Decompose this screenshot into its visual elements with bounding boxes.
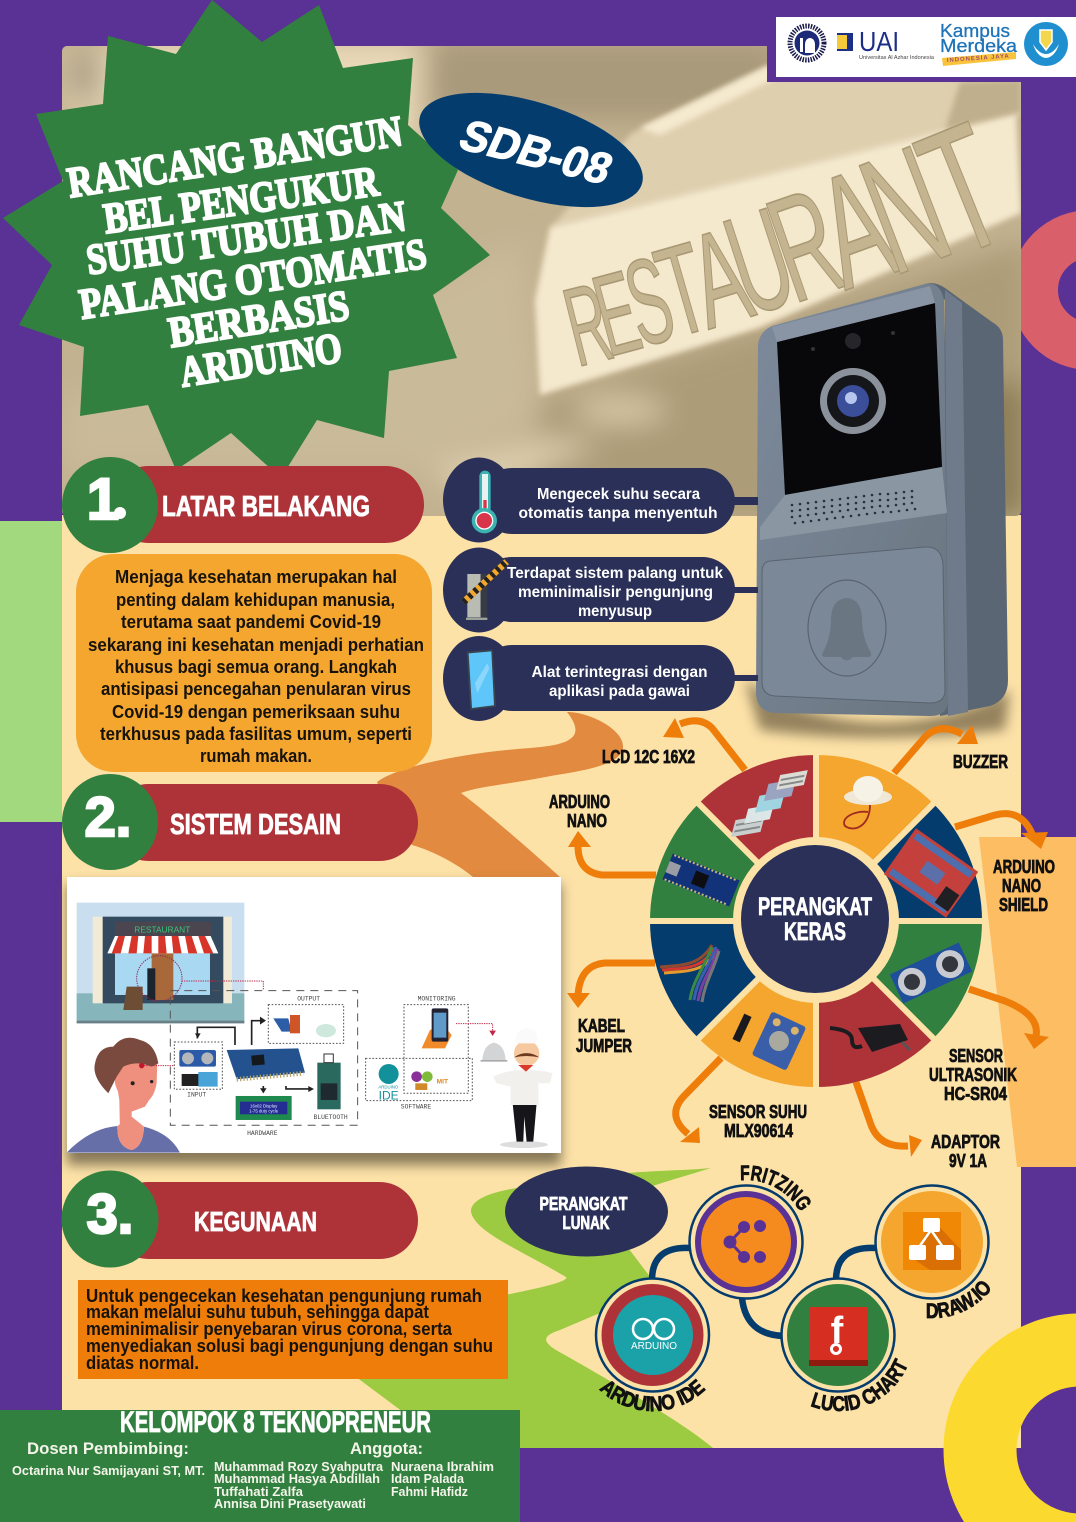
footer panel: team: Tuffahati Zalfa: [214, 1484, 304, 1499]
code badge: SDB-08: [406, 70, 656, 230]
panel: usage text: diatas normal.: [86, 1353, 199, 1373]
panel: usage text: makan melalui suhu tubuh, sehingga dapat: [86, 1302, 429, 1322]
software: Draw.io: DRAW.IO: [926, 1281, 990, 1318]
connectors from feature pills to doorbell: [730, 497, 758, 681]
hardware labels: [549, 747, 1055, 1171]
panel: background text: penting dalam kehidupan manusia,: [116, 590, 395, 610]
speaker grille: [791, 490, 916, 524]
sign lettering: T: [896, 85, 1031, 294]
logo: UAI: UAI: [859, 26, 899, 57]
lens: [811, 331, 895, 434]
logo: Kampus Merdeka: Merdeka: [940, 36, 1018, 56]
logo strip: [767, 10, 1076, 82]
icon: smartphone: [467, 649, 496, 710]
section heading 1: Latar Belakang: [62, 457, 424, 553]
feature pill: barrier gate: Terdapat sistem palang untuk: [507, 565, 723, 582]
illustration: hardware block: OUTPUT: [297, 996, 320, 1003]
panel: background text: sekarang ini kesehatan menjadi perhatian: [88, 635, 424, 655]
screen: [777, 303, 942, 495]
panel: light orange band at right: [979, 837, 1076, 1167]
feature pill: barrier gate: meminimalisir pengunjung: [518, 584, 713, 601]
illustration: chef: [481, 1028, 553, 1148]
panel: usage text: Untuk pengecekan kesehatan pengunjung rumah: [86, 1286, 482, 1306]
software: Lucidchart: LUCID CHART: [810, 1358, 908, 1412]
hardware labels: ARDUINO: [549, 792, 610, 812]
illustration: software and monitoring: [366, 996, 496, 1111]
hardware labels: JUMPER: [576, 1036, 632, 1056]
logo: Kampus Merdeka: Kampus: [940, 21, 1010, 41]
hardware labels: NANO: [1002, 876, 1041, 896]
hardware labels: LCD 12C 16X2: [602, 747, 695, 767]
illustration: software and monitoring: MONITORING: [418, 996, 456, 1003]
code badge: SDB-08: SDB-08: [452, 112, 620, 194]
panel: background text: khusus bagi semua orang. Langkah: [115, 657, 397, 677]
arrows from wheel to labels: [567, 718, 1049, 1157]
sign lettering: U: [708, 178, 812, 346]
arrow: nano shield: [955, 814, 1048, 849]
arrow: ultrasonic: [969, 989, 1049, 1049]
hardware labels: BUZZER: [953, 752, 1008, 772]
feature pill: temperature check: otomatis tanpa menyentuh: [518, 505, 718, 522]
panel: usage text: [78, 1280, 508, 1379]
hardware labels: MLX90614: [724, 1121, 793, 1141]
hardware labels: ARDUINO: [993, 857, 1055, 877]
component: arduino nano: [662, 854, 740, 906]
sign lettering: E: [581, 247, 652, 381]
illustration: hardware block: HARDWARE: [247, 1130, 278, 1137]
arrow: buzzer: [894, 725, 978, 773]
arrow: arduino nano: [568, 831, 656, 875]
arrow: temperature sensor: [676, 1058, 721, 1143]
section heading 2: Sistem Desain: 2.: [85, 785, 131, 848]
software heading ellipse: [505, 1166, 668, 1256]
hardware labels: ULTRASONIK: [929, 1065, 1017, 1085]
section heading 2: Sistem Desain: SISTEM DESAIN: [170, 809, 341, 841]
footer panel: team: Fahmi Hafidz: [391, 1484, 468, 1499]
component: jumper cables: [660, 945, 719, 1002]
illustration: restaurant storefront: RESTAURANT: [134, 926, 190, 935]
title: ARDUINO: [177, 325, 345, 397]
illustration: software and monitoring: ARDUINO: [378, 1085, 399, 1090]
illustration: software and monitoring: SOFTWARE: [401, 1104, 431, 1111]
arrow: LCD: [663, 718, 745, 770]
component: nano shield: [884, 828, 978, 918]
software: Fritzing: FRITZING: [740, 1165, 811, 1210]
component: power adaptor: [830, 1024, 910, 1052]
title: BERBASIS: [165, 282, 352, 357]
component: temperature sensor: [732, 1011, 806, 1071]
illustration: person: [67, 1038, 180, 1153]
arrow: adaptor: [856, 1082, 922, 1157]
section heading 3: Kegunaan: 3.: [87, 1182, 133, 1245]
sign lettering: A: [796, 134, 915, 323]
wheel hub: KERAS: [784, 918, 846, 946]
panel: background text: [76, 554, 432, 772]
panel: background text: terkhusus pada fasilitas umum, seperti: [100, 724, 412, 744]
panel: cream paper: [62, 515, 1021, 1448]
logo: UAI: Universitas Al Azhar Indonesia: [859, 55, 935, 61]
section heading 1: Latar Belakang: LATAR BELAKANG: [162, 491, 370, 523]
illustration: restaurant storefront: [77, 903, 263, 1023]
title: BEL PENGUKUR: [101, 158, 382, 243]
sign lettering: R: [749, 156, 861, 334]
background swoosh: orange: [377, 712, 623, 877]
section heading 1: Latar Belakang: 1: [87, 467, 119, 532]
logo: Tut Wuri Handayani: [1024, 22, 1068, 66]
icon: thermometer: [472, 471, 497, 533]
panel: light green strip at left: [0, 521, 72, 822]
illustration: software and monitoring: MIT: [437, 1078, 448, 1085]
illustration: hardware block: 16x02 Display: [250, 1103, 278, 1108]
software: Lucidchart: f: [831, 1310, 844, 1352]
illustration: hardware block: BLUETOOTH: [314, 1114, 348, 1121]
feature pill: temperature check: Mengecek suhu secara: [537, 486, 700, 503]
section heading 3: Kegunaan: [62, 1170, 418, 1268]
footer panel: team: Anggota:: [350, 1439, 423, 1458]
hardware wheel: [645, 750, 987, 1092]
illustration: hardware block: [170, 991, 358, 1137]
panel: usage text: menyediakan solusi bagi pengunjung dengan suhu: [86, 1336, 493, 1356]
footer panel: team: [0, 1406, 520, 1522]
panel: background text: antisipasi pencegahan penularan virus: [101, 679, 411, 699]
software: Lucidchart: [780, 1277, 908, 1412]
wheel hub: [741, 845, 889, 993]
hardware labels: 9V 1A: [949, 1151, 987, 1171]
component: ultrasonic sensor: [890, 942, 972, 1004]
title: RANCANG BANGUN: [64, 108, 405, 207]
software: Arduino IDE: ARDUINO IDE: [598, 1378, 706, 1412]
icon: barrier: [463, 562, 507, 620]
footer panel: team: Nuraena Ibrahim: [391, 1459, 494, 1474]
logo: Al Azhar: [790, 26, 824, 60]
panel: background text: Covid-19 dengan pemeriksaan suhu: [112, 702, 400, 722]
footer panel: team: Octarina Nur Samijayani ST, MT.: [12, 1464, 205, 1478]
footer panel: team: Idam Palada: [391, 1471, 465, 1486]
title starburst: [3, 0, 490, 478]
illustration: hardware block: 1-75 duty cycle: [249, 1108, 279, 1113]
hardware labels: KABEL: [578, 1016, 625, 1036]
sign lettering: R: [553, 259, 622, 390]
component: LCD: [731, 770, 808, 837]
feature pill: barrier gate: menyusup: [578, 603, 652, 620]
footer panel: team: Muhammad Hasya Abdillah: [214, 1471, 380, 1486]
footer panel: team: Muhammad Rozy Syahputra: [214, 1459, 384, 1474]
panel: background text: rumah makan.: [200, 746, 312, 766]
hardware labels: SENSOR SUHU: [709, 1102, 807, 1122]
software: Fritzing: [688, 1165, 811, 1300]
decorative ring: coral: [1034, 234, 1076, 346]
software heading ellipse: LUNAK: [562, 1213, 610, 1233]
logo: UAI: [837, 26, 935, 61]
arrow: jumper: [567, 963, 655, 1008]
software heading ellipse: PERANGKAT: [540, 1194, 628, 1214]
doorbell device: [745, 283, 1010, 738]
hardware labels: SHIELD: [999, 895, 1048, 915]
sign lettering: A: [673, 200, 766, 358]
feature pill: barrier gate: [443, 548, 735, 632]
photo: restaurant sign in sepia: [62, 40, 1031, 520]
panel: system design diagram: [67, 877, 561, 1165]
hardware labels: SENSOR: [949, 1046, 1003, 1066]
section heading 3: Kegunaan: KEGUNAAN: [194, 1206, 317, 1237]
sectors: [816, 755, 933, 921]
title: [64, 108, 430, 397]
footer panel: team: Dosen Pembimbing:: [27, 1439, 189, 1458]
software: Arduino IDE: [594, 1277, 710, 1412]
illustration: hardware block: INPUT: [187, 1092, 206, 1099]
sign lettering: [562, 120, 991, 367]
feature pill: phone app: Alat terintegrasi dengan: [532, 664, 708, 681]
wheel hub: PERANGKAT: [758, 893, 872, 921]
component: buzzer: [844, 776, 892, 828]
doorbell button: [762, 547, 945, 703]
footer panel: team: Annisa Dini Prasetyawati: [214, 1496, 366, 1511]
sign lettering: S: [612, 232, 687, 373]
panel: background text: Menjaga kesehatan merupakan hal: [115, 567, 397, 587]
sign lettering: N: [839, 111, 972, 311]
background swoosh: light green: [340, 1168, 713, 1448]
feature pill: temperature check: [443, 458, 735, 542]
hardware labels: ADAPTOR: [931, 1132, 1000, 1152]
logo: Kampus Merdeka: [940, 21, 1018, 66]
decorative ring: yellow: [980, 1350, 1076, 1522]
section heading 2: Sistem Desain: [62, 774, 418, 870]
footer panel: team: KELOMPOK 8 TEKNOPRENEUR: [120, 1406, 431, 1439]
software: Draw.io: [874, 1184, 990, 1318]
title: PALANG OTOMATIS: [76, 231, 430, 329]
hardware labels: HC-SR04: [944, 1084, 1007, 1104]
feature pill: phone app: [443, 636, 735, 721]
illustration: software and monitoring: IDE: [379, 1089, 399, 1103]
hardware labels: NANO: [567, 811, 607, 831]
title: SUHU TUBUH DAN: [83, 193, 409, 284]
logo: Kampus Merdeka: INDONESIA JAYA: [947, 54, 1010, 64]
connector arcs between software circles: [652, 1248, 876, 1336]
panel: usage text: meminimalisir penyebaran virus corona, serta: [86, 1319, 453, 1339]
panel: background text: terutama saat pandemi Covid-19: [121, 612, 381, 632]
software: Arduino IDE: ARDUINO: [631, 1340, 677, 1352]
feature pill: phone app: aplikasi pada gawai: [549, 683, 690, 700]
sign lettering: T: [642, 214, 723, 364]
